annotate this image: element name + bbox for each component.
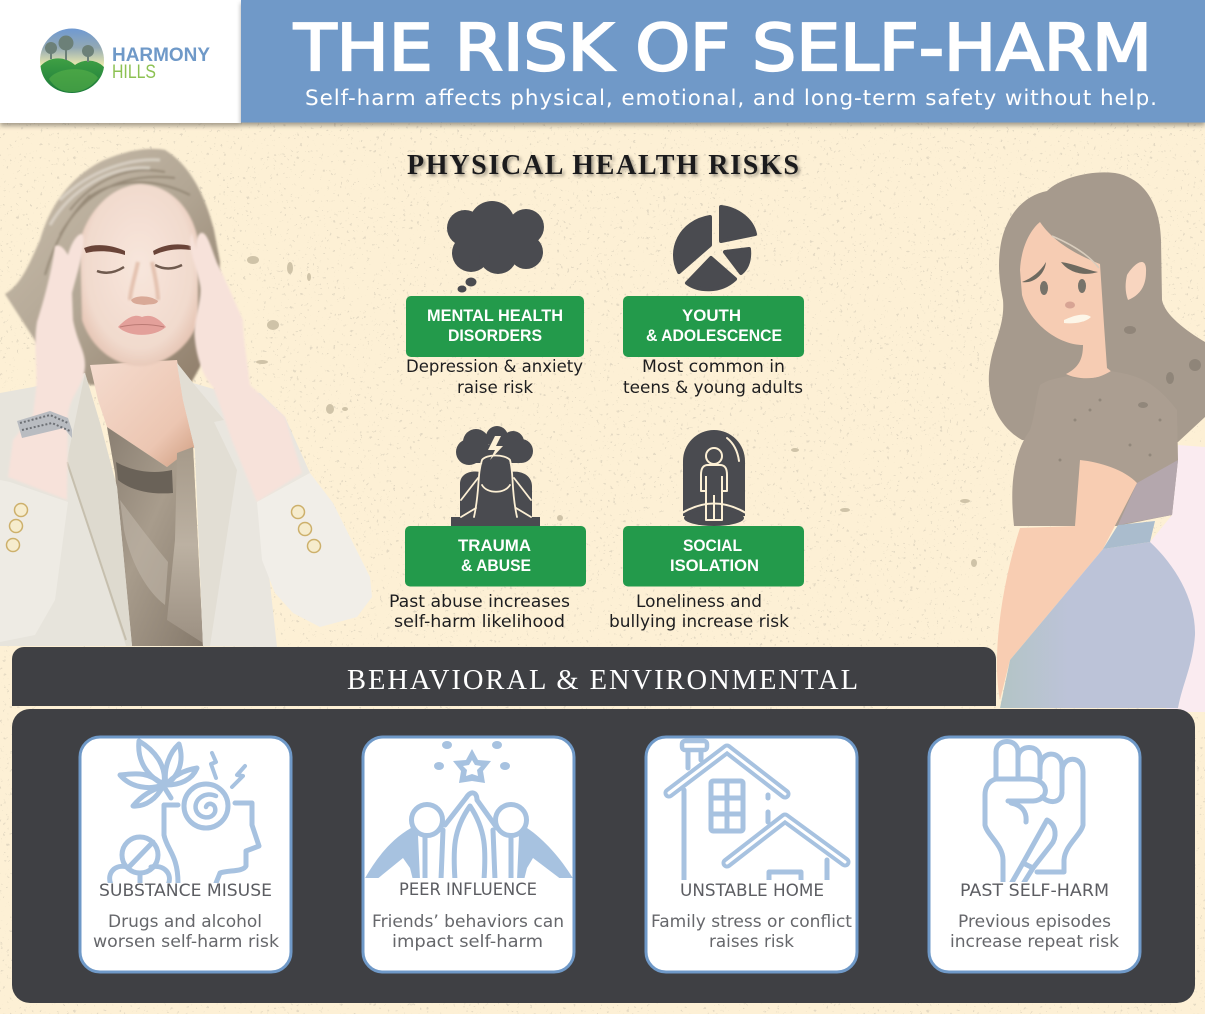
label: mental health disorders: DISORDERS xyxy=(448,326,542,345)
sleeve buttons xyxy=(6,504,320,552)
card text: raises risk xyxy=(709,932,794,952)
card text: Drugs and alcohol xyxy=(108,912,262,932)
card text xyxy=(651,912,852,952)
card: unstable home xyxy=(646,737,857,972)
card text xyxy=(93,912,279,952)
logo wordmark: HARMONY xyxy=(112,45,210,66)
subtitle: Self-harm affects physical, emotional, and long-term safety without help. xyxy=(305,86,1157,111)
card text: Previous episodes xyxy=(958,912,1111,932)
card text xyxy=(372,912,564,952)
blouse xyxy=(107,427,203,646)
description xyxy=(609,592,789,632)
label: social isolation: SOCIAL xyxy=(683,536,742,555)
icon: fist and blade xyxy=(985,742,1083,884)
card heading: UNSTABLE HOME xyxy=(680,881,824,901)
card text: impact self-harm xyxy=(392,932,543,952)
heading: physical health risks: PHYSICAL HEALTH RISKS xyxy=(407,150,799,181)
logo wordmark xyxy=(112,45,210,83)
card heading: PAST SELF-HARM xyxy=(960,881,1109,901)
panel: behavioral and environmental cards xyxy=(12,709,1195,1003)
banner: behavioral and environmental: BEHAVIORAL & ENVIRONMENTAL xyxy=(347,665,858,696)
item: social isolation xyxy=(609,430,804,632)
label: youth and adolescence: YOUTH xyxy=(682,306,741,325)
description: Depression & anxiety xyxy=(406,357,583,377)
banner: behavioral and environmental xyxy=(12,647,996,706)
label: mental health disorders xyxy=(406,296,584,357)
card heading: SUBSTANCE MISUSE xyxy=(99,881,272,901)
icon: distressed person under storm cloud xyxy=(451,426,540,526)
right forearm and hand xyxy=(190,233,302,502)
logo wordmark: HILLS xyxy=(112,62,156,83)
description: Most common in xyxy=(642,357,785,377)
card: peer influence xyxy=(363,737,574,972)
hair xyxy=(5,149,220,385)
title: THE RISK OF SELF-HARM xyxy=(293,12,1152,86)
card text: increase repeat risk xyxy=(950,932,1119,952)
neck and chest xyxy=(90,360,195,467)
card: past self-harm xyxy=(929,737,1140,972)
card text: worsen self-harm risk xyxy=(93,932,279,952)
wristwatch xyxy=(17,411,72,438)
description: teens & young adults xyxy=(623,378,803,398)
card text: Family stress or conflict xyxy=(651,912,852,932)
header: title banner xyxy=(241,0,1205,122)
label: mental health disorders: MENTAL HEALTH xyxy=(427,306,563,325)
description xyxy=(389,592,570,632)
description xyxy=(406,357,583,398)
item: mental health disorders xyxy=(406,201,584,398)
photo: stressed woman xyxy=(0,149,372,647)
label: social isolation: ISOLATION xyxy=(670,556,759,575)
left sleeve xyxy=(0,480,68,642)
label: trauma and abuse xyxy=(405,526,586,586)
illustration: worried woman xyxy=(989,172,1205,712)
icon: thought cloud xyxy=(447,201,544,292)
card text xyxy=(950,912,1119,952)
icon: houses xyxy=(669,741,845,885)
description: Loneliness and xyxy=(636,592,762,612)
description: raise risk xyxy=(457,378,533,398)
icon: pie chart xyxy=(675,207,755,289)
label: youth and adolescence xyxy=(623,296,804,357)
card heading: PEER INFLUENCE xyxy=(399,880,537,900)
label: trauma and abuse: TRAUMA xyxy=(458,536,531,555)
description: Past abuse increases xyxy=(389,592,570,612)
logo mark xyxy=(40,28,104,93)
right sleeve xyxy=(257,473,372,627)
card: substance misuse xyxy=(80,737,291,972)
item: trauma and abuse xyxy=(389,426,586,632)
icon: person in glass dome xyxy=(682,430,746,526)
label: trauma and abuse: & ABUSE xyxy=(461,556,531,575)
label: youth and adolescence: & ADOLESCENCE xyxy=(646,326,782,345)
jacket body xyxy=(0,363,310,647)
header: logo panel xyxy=(0,0,241,123)
label: social isolation xyxy=(623,526,804,586)
left forearm and hand xyxy=(8,234,85,500)
icon: cannabis leaf, spiral head and pills xyxy=(110,741,259,885)
card text: Friends’ behaviors can xyxy=(372,912,564,932)
description xyxy=(623,357,803,398)
icon: friends reaching for a star xyxy=(364,741,574,880)
description: self-harm likelihood xyxy=(394,612,565,632)
face xyxy=(80,184,198,366)
description: bullying increase risk xyxy=(609,612,789,632)
item: youth and adolescence xyxy=(623,207,804,398)
